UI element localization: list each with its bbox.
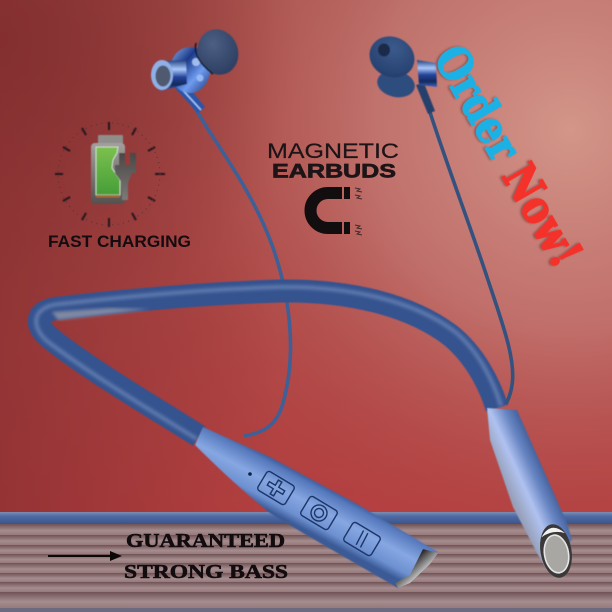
chrome end cap (395, 549, 438, 588)
stem (416, 83, 435, 114)
metal housing (417, 60, 437, 87)
clock ticks (55, 122, 165, 227)
background: wooden floor (0, 524, 612, 612)
right battery module (487, 408, 576, 580)
left earbud cable (193, 104, 291, 436)
minus button (343, 521, 381, 557)
eartip (191, 24, 245, 80)
right earbud (363, 29, 437, 114)
background: blue skirting strip (0, 512, 612, 524)
arrow (48, 551, 122, 561)
fast charging icon (55, 122, 165, 227)
rear tip (375, 67, 417, 101)
guaranteed strong bass label: STRONG BASS (124, 561, 288, 583)
eartip (363, 29, 421, 85)
clock minute dots (58, 123, 160, 225)
guaranteed strong bass label: GUARANTEED (126, 530, 285, 552)
left control module (195, 427, 438, 588)
right earbud cable (428, 106, 513, 404)
barrel (160, 60, 187, 91)
battery (91, 135, 136, 204)
metal housing (170, 47, 210, 93)
left earbud (151, 24, 245, 113)
neckband tube (36, 287, 501, 439)
fast charging label: FAST CHARGING (48, 233, 191, 251)
inner corner highlight (52, 308, 150, 320)
stem (174, 80, 205, 113)
icon: magnet (310, 187, 362, 235)
power button (300, 495, 338, 531)
magnetic earbuds heading: MAGNETIC (267, 140, 399, 163)
magnetic earbuds heading (267, 140, 399, 182)
front face (151, 60, 173, 90)
plus button (257, 470, 295, 506)
guaranteed strong bass label (124, 530, 288, 583)
order now text: Order Now! (423, 36, 593, 276)
chrome end cap (536, 522, 576, 580)
plug (115, 153, 136, 200)
magnetic earbuds heading: EARBUDS (272, 160, 396, 182)
microphone dot (248, 472, 252, 476)
